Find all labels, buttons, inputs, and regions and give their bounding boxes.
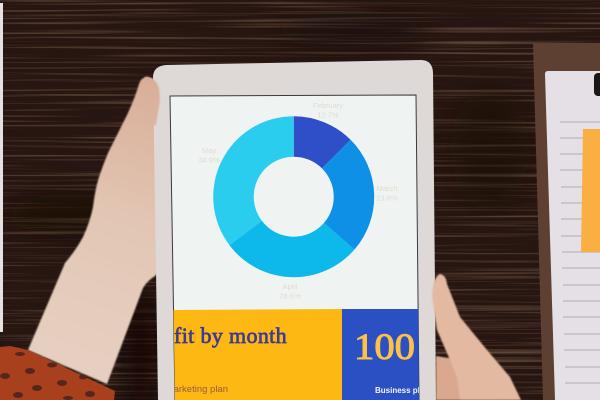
segment: March (322, 140, 374, 250)
label: February: February (313, 101, 343, 110)
caption: business plan: Business plan (375, 386, 429, 395)
sleeve pattern (0, 352, 95, 400)
clipboard board (533, 43, 600, 400)
yellow panel (174, 309, 342, 400)
white object at left edge (0, 3, 3, 332)
ruled lines (560, 122, 600, 383)
paper sheet (545, 71, 600, 400)
tablet body (153, 60, 436, 400)
fingers below thumb (436, 356, 460, 400)
red patterned sleeve (0, 346, 115, 400)
segment: April (229, 221, 354, 277)
number: 100: 100 (354, 327, 415, 368)
chart labels (198, 101, 398, 300)
label: February: 12.7% (317, 110, 339, 120)
screen content (174, 102, 419, 400)
segment: May (213, 116, 294, 245)
thumb and palm (432, 274, 521, 400)
black clip (594, 73, 600, 96)
clipboard (533, 43, 600, 400)
segment: February (294, 116, 351, 168)
label: May: May (202, 146, 216, 155)
heading: profit by month: Profit by month (142, 323, 287, 348)
label: May: 34.9% (198, 156, 220, 164)
forearm and palm (28, 77, 160, 384)
blue panel (342, 309, 419, 400)
label: April: April (282, 282, 298, 291)
right hand (432, 274, 521, 400)
caption: marketing plan: Marketing plan (166, 384, 228, 395)
donut chart (213, 116, 374, 277)
label: March: March (377, 184, 397, 193)
left hand behind tablet (0, 77, 160, 400)
sticky note (581, 129, 600, 252)
label: April: 28.6% (279, 292, 301, 300)
left thumb over tablet edge (144, 77, 160, 125)
tablet (142, 60, 436, 400)
label: March: 23.8% (376, 194, 398, 202)
tablet screen (170, 94, 420, 400)
